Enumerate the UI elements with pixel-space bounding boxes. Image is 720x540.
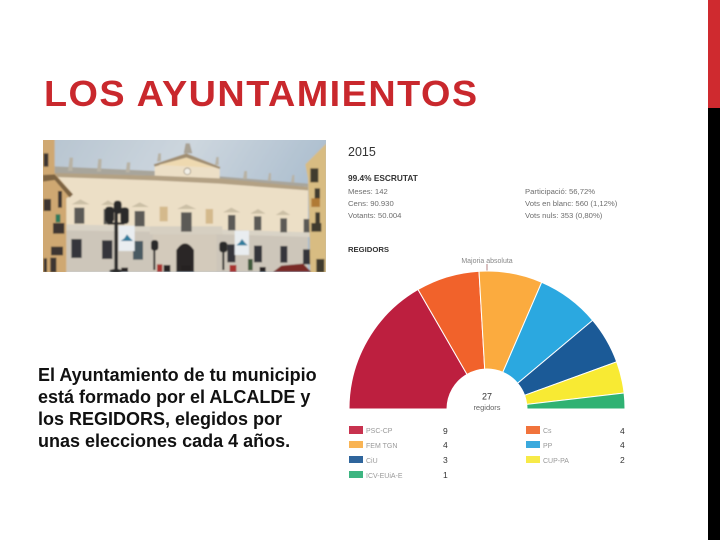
doorway [176, 243, 194, 272]
seat total: 27 [482, 392, 492, 402]
legend row: CiU: CiU [366, 458, 378, 465]
people and cars [273, 264, 311, 272]
street lamps [105, 201, 227, 273]
majority label: Majoria absoluta [461, 258, 513, 265]
seat total [473, 392, 501, 412]
legend row: CUP-PA: 2 [620, 455, 625, 465]
statues [184, 143, 192, 153]
election results panel [348, 145, 625, 480]
sky [40, 135, 330, 275]
turnout stats left: Cens: 90.930 [348, 199, 394, 208]
body text [38, 365, 317, 451]
body text: unas elecciones cada 4 años. [38, 431, 290, 451]
seat total: regidors [473, 403, 501, 412]
legend row: CiU [349, 455, 448, 465]
legend row: CUP-PA [526, 455, 625, 465]
turnout stats right: Vots nuls: 353 (0,80%) [525, 211, 603, 220]
legend row: FEM TGN: 4 [443, 440, 448, 450]
legend row: Cs: 4 [620, 426, 625, 436]
legend row: ICV-EUiA [349, 470, 448, 480]
legend row: ICV-EUiA: ICV-EUiA-E [366, 473, 403, 480]
legend row: Cs [526, 426, 625, 436]
turnout stats right [525, 187, 618, 220]
ground floor stone [66, 230, 308, 272]
FEM TGN segment [479, 271, 542, 372]
ground windows [71, 239, 310, 264]
councillors heading: REGIDORS [348, 245, 389, 254]
legend row: Cs: Cs [543, 428, 552, 435]
legend row: PSC-CP: 9 [443, 426, 448, 436]
semicircle seat chart [349, 271, 625, 409]
title: LOS AYUNTAMIENTOS [44, 73, 479, 114]
turnout stats right: Participació: 56,72% [525, 187, 595, 196]
left building [40, 135, 73, 275]
majority label [461, 258, 513, 272]
legend row: FEM TGN [349, 440, 448, 450]
CUP-PA segment [525, 362, 624, 404]
cornice [55, 173, 308, 190]
red bar segment [708, 0, 720, 108]
main facade [55, 153, 308, 272]
pediment [154, 153, 220, 169]
legend [349, 426, 625, 480]
legend row: ICV-EUiA: 1 [443, 470, 448, 480]
body text: El Ayuntamiento de tu municipio [38, 365, 317, 385]
ICV-EUiA segment [527, 393, 625, 409]
body text: los REGIDORS, elegidos por [38, 409, 282, 429]
CiU segment [518, 320, 617, 395]
right building [305, 143, 326, 275]
right accent bar [708, 0, 720, 540]
Cs segment [418, 271, 485, 374]
legend row: CUP-PA: CUP-PA [543, 458, 569, 465]
clock [184, 168, 191, 175]
balustrade [55, 166, 155, 176]
legend row: FEM TGN: FEM TGN [366, 443, 397, 450]
year heading: 2015 [348, 145, 376, 159]
legend row: PP [526, 440, 625, 450]
upper windows [74, 208, 310, 232]
legend row: PSC-CP [349, 426, 448, 436]
turnout stats left: Meses: 142 [348, 187, 388, 196]
photo: town hall building [43, 140, 326, 272]
scrutiny heading: 99.4% ESCRUTAT [348, 173, 418, 183]
PSC-CP segment [349, 290, 467, 409]
banners [119, 226, 135, 251]
turnout stats right: Vots en blanc: 560 (1,12%) [525, 199, 618, 208]
window frames [72, 199, 290, 224]
turnout stats left [348, 187, 402, 220]
legend row: PP: PP [543, 443, 553, 450]
body text: está formado por el ALCALDE y [38, 387, 310, 407]
legend row: PSC-CP: PSC-CP [366, 428, 393, 435]
legend row: CiU: 3 [443, 455, 448, 465]
turnout stats left: Votants: 50.004 [348, 211, 402, 220]
legend row: PP: 4 [620, 440, 625, 450]
PP segment [503, 282, 593, 383]
